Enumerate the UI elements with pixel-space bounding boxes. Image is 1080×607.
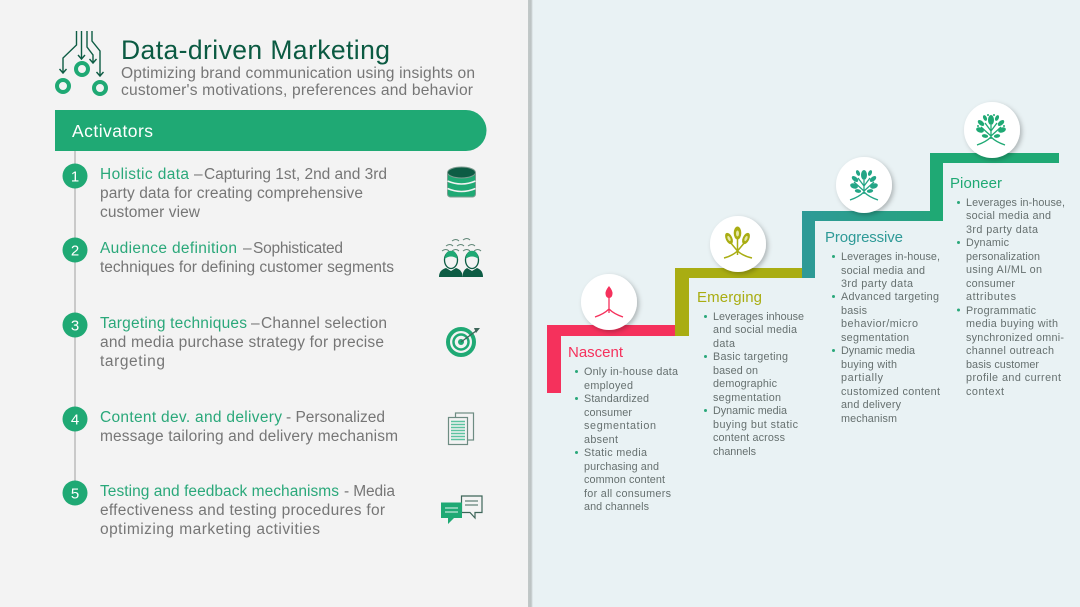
text block: pioneer: Leverages in-house, bbox=[966, 197, 1065, 209]
text block: emerging: buying but static bbox=[713, 419, 799, 431]
step: nascent bbox=[547, 325, 676, 393]
text block: pioneer: context bbox=[966, 386, 1004, 398]
text block: pioneer: profile and current bbox=[966, 372, 1061, 384]
text block: emerging: Dynamic media bbox=[713, 405, 787, 417]
text block: pioneer: Pioneer bbox=[950, 175, 1002, 192]
text block: progressive: Leverages in-house, bbox=[841, 251, 940, 263]
icon: documents bbox=[448, 413, 474, 444]
text block: pioneer: Programmatic bbox=[966, 305, 1037, 317]
text block: pioneer: channel outreach bbox=[966, 345, 1054, 357]
text block: nascent: Standardized bbox=[584, 393, 649, 405]
activator 3: targeting techniques: and media purchase strategy for precise bbox=[100, 334, 384, 351]
text block: nascent: for all consumers bbox=[584, 488, 672, 500]
text block: progressive: buying with bbox=[841, 359, 897, 371]
text block: progressive: customized content bbox=[841, 386, 940, 398]
subtitle: Optimizing brand communication using insights on bbox=[121, 65, 475, 82]
text block: nascent: Only in-house data bbox=[584, 366, 678, 378]
activator 5: testing and feedback mechanisms: Testing and feedback mechanisms bbox=[100, 483, 339, 500]
text block: progressive: partially bbox=[841, 372, 884, 384]
text block: emerging: Emerging bbox=[697, 289, 762, 306]
text block: nascent: common content bbox=[584, 474, 665, 486]
icon: audience bbox=[439, 238, 483, 277]
text block: progressive: behavior/micro bbox=[841, 318, 918, 330]
text block: pioneer: consumer bbox=[966, 278, 1015, 290]
text block: pioneer: using AI/ML on bbox=[966, 264, 1042, 276]
activator 5: testing and feedback mechanisms: effectiveness and testing procedures for bbox=[100, 502, 385, 519]
text block: nascent: consumer bbox=[584, 407, 632, 419]
text block: nascent: Static media bbox=[584, 447, 647, 459]
activator 2: audience definition: 2 bbox=[71, 242, 79, 260]
activator 2: audience definition: techniques for defining customer segments bbox=[100, 259, 394, 276]
activator 5: testing and feedback mechanisms: optimizing marketing activities bbox=[100, 521, 320, 538]
activator 4: content dev. and delivery bbox=[62, 406, 474, 445]
text block: progressive bbox=[825, 229, 940, 425]
activator 3: targeting techniques: – bbox=[251, 315, 260, 332]
text block: emerging: demographic bbox=[713, 378, 778, 390]
activator 4: content dev. and delivery: - Personalized bbox=[286, 409, 385, 426]
step: pioneer bbox=[930, 153, 1059, 221]
subtitle: customer's motivations, preferences and behavior bbox=[121, 82, 473, 99]
activator 1: holistic data: 1 bbox=[71, 168, 79, 186]
text block: progressive: social media and bbox=[841, 265, 925, 277]
activator 1: holistic data: party data for creating comprehensive bbox=[100, 185, 363, 202]
text block: progressive: segmentation bbox=[841, 332, 909, 344]
text block: pioneer: social media and bbox=[966, 210, 1051, 222]
heading bar: Activators: Activators bbox=[72, 121, 153, 141]
text block: nascent bbox=[568, 344, 678, 513]
icon: progressive tree bbox=[836, 157, 892, 213]
heading bar: Activators bbox=[55, 110, 486, 151]
activator 1: holistic data bbox=[62, 164, 476, 221]
icon: database bbox=[448, 167, 476, 197]
text block: nascent: employed bbox=[584, 380, 633, 392]
text block: progressive: and delivery bbox=[841, 399, 902, 411]
activator 3: targeting techniques: Targeting techniques bbox=[100, 315, 247, 332]
activator 1: holistic data: Holistic data bbox=[100, 166, 189, 183]
text block: nascent: Nascent bbox=[568, 344, 624, 361]
text block: progressive: 3rd party data bbox=[841, 278, 913, 290]
text block: progressive: Advanced targeting bbox=[841, 291, 939, 303]
text block: nascent: purchasing and bbox=[584, 461, 659, 473]
icon: emerging plant bbox=[710, 216, 766, 272]
activator 2: audience definition: Sophisticated bbox=[253, 240, 343, 257]
activator 5: testing and feedback mechanisms bbox=[62, 480, 482, 538]
activator 3: targeting techniques bbox=[62, 312, 480, 370]
activator 3: targeting techniques: 3 bbox=[71, 318, 79, 334]
text block: emerging: Leverages inhouse bbox=[713, 311, 804, 323]
text block: pioneer: attributes bbox=[966, 291, 1017, 303]
icon: data flowing to customers bbox=[57, 31, 106, 94]
text block: emerging: based on bbox=[713, 365, 758, 377]
text block: nascent: absent bbox=[584, 434, 618, 446]
title: Data-driven Marketing bbox=[121, 35, 390, 65]
activator 1: holistic data: Capturing 1st, 2nd and 3rd bbox=[204, 166, 387, 183]
activator 2: audience definition: – bbox=[243, 240, 252, 257]
text block: pioneer: personalization bbox=[966, 251, 1040, 263]
text block: pioneer: synchronized omni- bbox=[966, 332, 1064, 344]
activator 4: content dev. and delivery: 4 bbox=[71, 412, 79, 428]
text block: emerging bbox=[697, 289, 804, 458]
text block: pioneer: media buying with bbox=[966, 318, 1058, 330]
icon: pioneer tree bbox=[964, 102, 1020, 158]
text block: pioneer: basis customer bbox=[966, 359, 1039, 371]
activator 4: content dev. and delivery: message tailoring and delivery mechanism bbox=[100, 428, 398, 445]
activator 2: audience definition bbox=[62, 238, 483, 277]
activator 5: testing and feedback mechanisms: 5 bbox=[71, 486, 79, 502]
text block: pioneer: 3rd party data bbox=[966, 224, 1038, 236]
activator 3: targeting techniques: targeting bbox=[100, 353, 165, 370]
text block: emerging: and social media bbox=[713, 324, 797, 336]
activator 5: testing and feedback mechanisms: - Media bbox=[344, 483, 395, 500]
text block: nascent: and channels bbox=[584, 501, 650, 513]
activator 1: holistic data: customer view bbox=[100, 204, 201, 221]
text block: nascent: segmentation bbox=[584, 420, 656, 432]
icon: target bbox=[448, 328, 480, 355]
activator 2: audience definition: Audience definition bbox=[100, 240, 237, 257]
text block: pioneer bbox=[950, 175, 1065, 398]
staircase: maturity steps bbox=[547, 153, 1059, 393]
text block: progressive: Dynamic media bbox=[841, 345, 915, 357]
text block: progressive: basis bbox=[841, 305, 868, 317]
text block: emerging: Basic targeting bbox=[713, 351, 788, 363]
text block: pioneer: Dynamic bbox=[966, 237, 1010, 249]
activator 4: content dev. and delivery: Content dev. and delivery bbox=[100, 409, 282, 426]
subtitle bbox=[121, 65, 475, 99]
icon: nascent sprout bbox=[581, 274, 637, 330]
text block: emerging: segmentation bbox=[713, 392, 781, 404]
text block: emerging: content across bbox=[713, 432, 786, 444]
text block: emerging: channels bbox=[713, 446, 757, 458]
step: progressive bbox=[802, 211, 931, 278]
step: emerging bbox=[675, 268, 803, 336]
panel: activators bbox=[0, 0, 533, 607]
text block: progressive: mechanism bbox=[841, 413, 897, 425]
text block: emerging: data bbox=[713, 338, 735, 350]
activator 3: targeting techniques: Channel selection bbox=[261, 315, 387, 332]
activator 1: holistic data: – bbox=[194, 166, 203, 183]
text block: progressive: Progressive bbox=[825, 229, 903, 246]
icon: speech bubbles bbox=[441, 496, 482, 524]
